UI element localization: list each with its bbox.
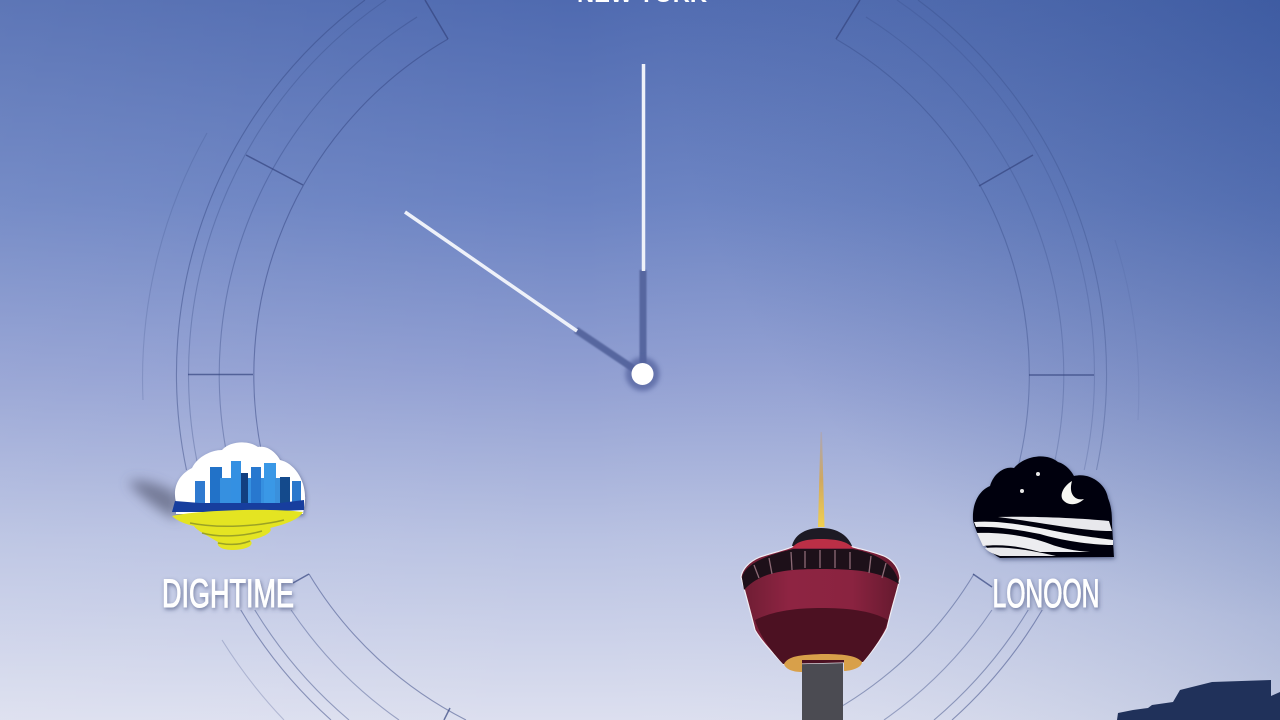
tower gold ring (784, 654, 862, 672)
tower head (741, 528, 900, 664)
clock dial: concentric rings (143, 0, 1139, 720)
clock dial: hour tick marks (188, 0, 1094, 720)
icon: daytime city cloud (128, 442, 305, 550)
clock hand: hour (405, 212, 634, 369)
tower shaft (802, 655, 843, 720)
landmark: observation tower (741, 432, 900, 720)
skyline building (1117, 680, 1280, 720)
icon: night cloud with moon (973, 456, 1114, 558)
tower spire (818, 432, 824, 527)
clock hand: minute (640, 64, 646, 366)
clock centre pivot (626, 357, 660, 391)
label: daytime: DIGHTIME (162, 572, 294, 616)
label: London: LONOON (992, 572, 1100, 616)
